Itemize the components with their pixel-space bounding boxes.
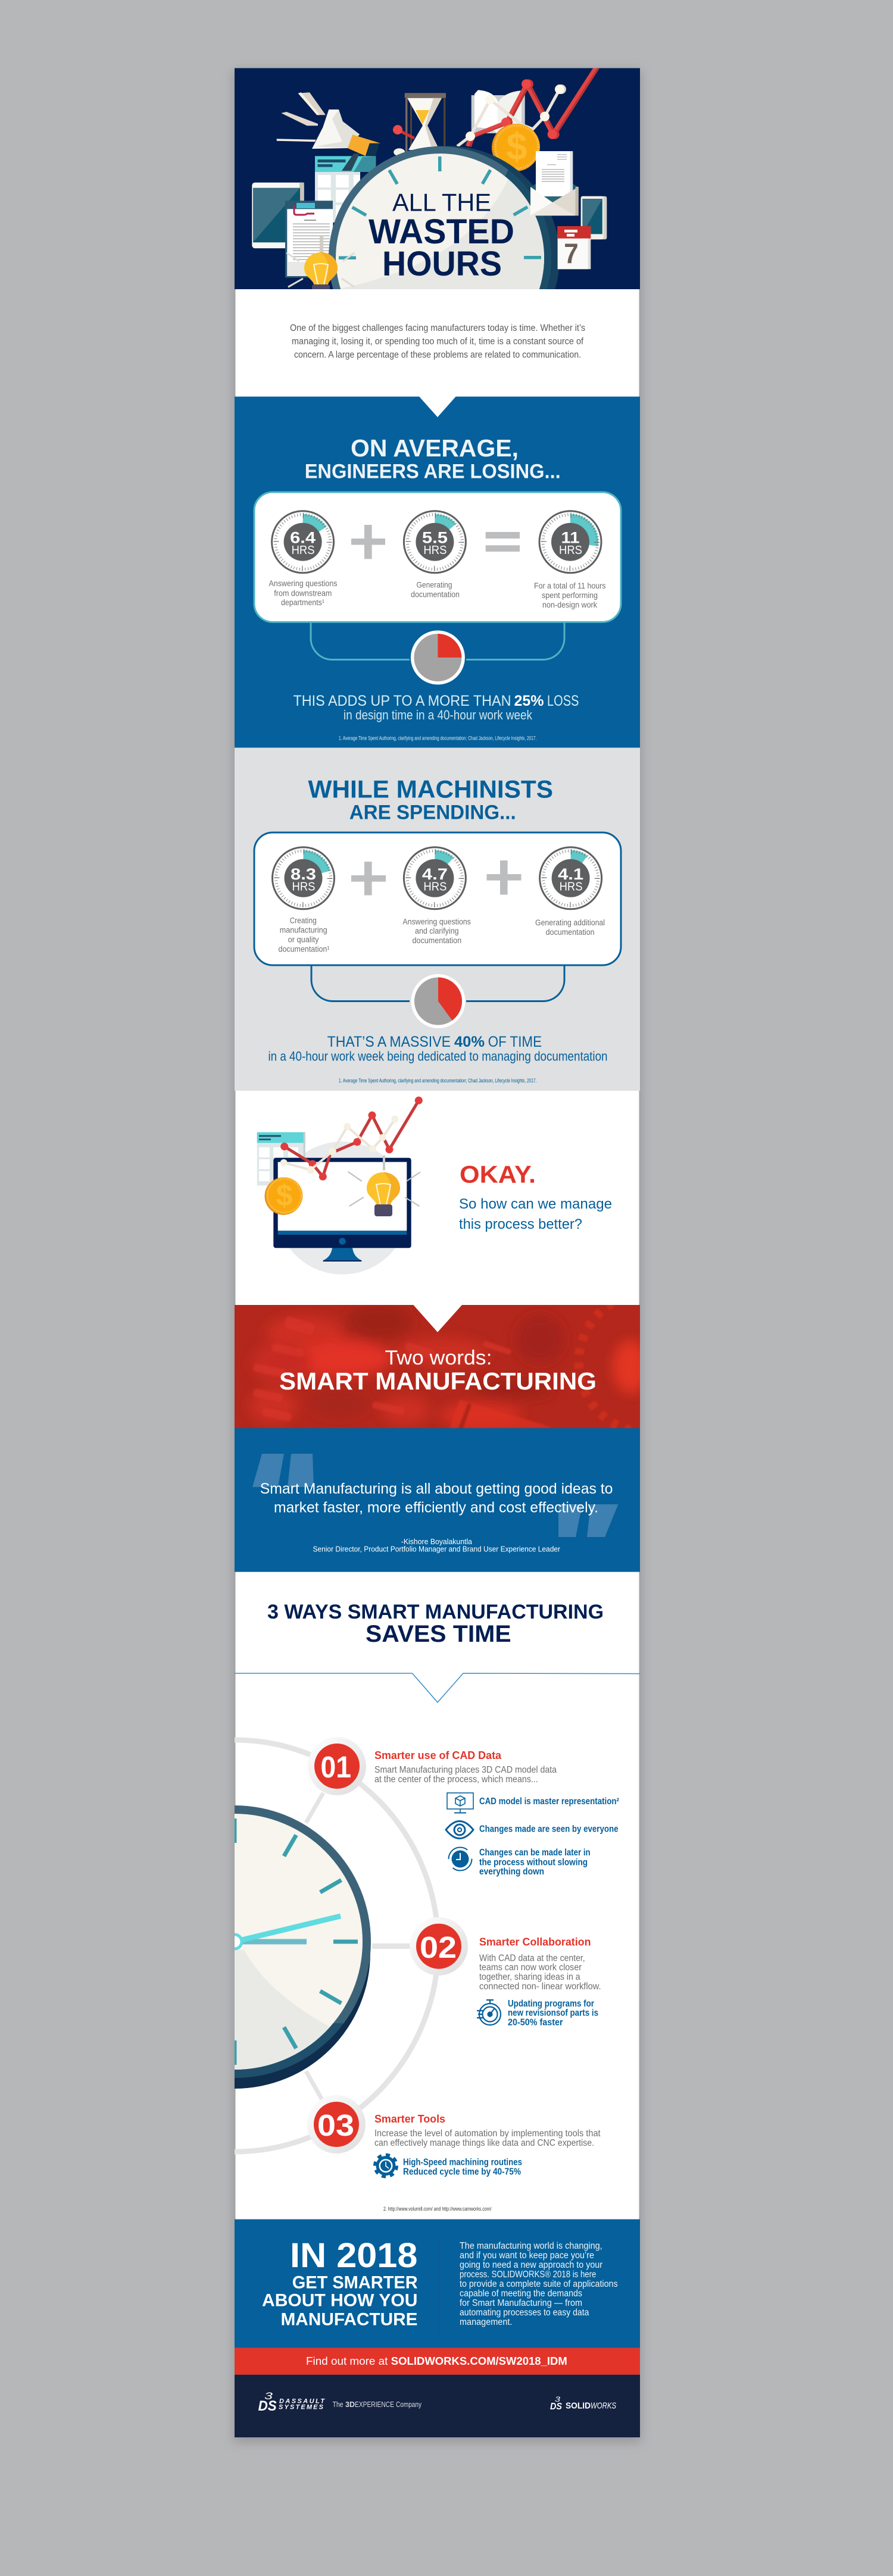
benefit: faster programs: new revisionsof parts is [508,2008,598,2018]
attribution: Senior Director, Product Portfolio Manager and Brand User Experience Leader [313,1545,560,1554]
panel: engineers section [235,396,640,748]
caption: answering questions: from downstream [274,589,332,597]
tagline: EXPERIENCE [355,2400,394,2409]
pointer notch [413,1304,462,1332]
paragraph: The manufacturing world is changing, [460,2241,602,2251]
paragraph: automating processes to easy data [460,2308,589,2318]
stopwatch: 6.4 hrs [272,511,334,573]
stopwatch: 5.5 hrs: HRS [423,544,447,557]
logo: solidworks: 3 [555,2395,560,2403]
icon: megaphone [277,92,380,156]
caption: additional documentation: Generating additional [535,918,605,927]
stopwatch: 5.5 hrs [404,511,466,573]
chart: red trend line [280,1097,423,1181]
title: ALL THE [392,188,491,217]
attribution [313,1538,560,1554]
heading: ON AVERAGE, [351,434,519,462]
paragraph [460,2241,618,2327]
icon: light bulb [286,252,355,289]
panel: two words banner [235,1305,640,1428]
tagline [333,2400,421,2409]
spokes [306,1793,411,2099]
benefit: changes later: everything down [479,1867,544,1877]
stopwatch: 4.1 hrs: HRS [560,880,583,893]
heading [305,434,561,483]
call to action bar: Find out more at [306,2355,388,2367]
spreadsheet [257,1132,305,1185]
text block: smarter collaboration: connected non- linear workflow. [479,1982,601,1992]
caption: total hours: For a total of 11 hours [534,581,606,590]
plus sign [351,525,385,559]
text block: smarter tools: Increase the level of automation by implementing tools that [374,2129,601,2139]
benefit: faster programs: 20-50% faster [508,2017,563,2028]
panel: machinists section [235,747,640,1091]
logo: solidworks: DS [550,2402,562,2412]
quote text: market faster, more efficiently and cost effectively. [274,1500,598,1516]
logo: dassault systemes: DASSAULT [279,2397,325,2405]
caption: answering questions: documentation [412,936,461,945]
icon: desk calendar [558,226,591,269]
caption: creating documentation: or quality [288,935,319,944]
question text [459,1196,612,1232]
caption: answering questions: departments¹ [281,598,324,607]
panel: three ways diagram [235,1737,619,2212]
icon: phone [581,196,607,239]
panel: quote [235,1428,640,1572]
footnote: 1. Average Time Spent Authoring, clarifying and amending documentation; Chad Jackson, Lifecycle Insights, 2017. [339,1078,536,1084]
text block: smarter tools [374,2113,601,2148]
icon: open book [472,90,525,133]
caption: creating documentation: Creating [290,916,317,925]
icon: light bulb [348,1156,420,1216]
benefit: high-speed machining: Reduced cycle time by 40-75% [403,2167,521,2177]
text block: smarter tools: can effectively manage things like data and CNC expertise. [374,2138,594,2148]
panel: hero header [235,68,640,289]
clock hands [227,1916,341,1949]
connector bracket [311,965,564,1001]
stopwatch: 11 hrs: HRS [559,544,582,557]
caption: creating documentation: documentation¹ [279,944,330,953]
text block: smarter use of CAD data: Smarter use of CAD Data [374,1749,502,1761]
heading: 3 ways: 3 WAYS SMART MANUFACTURING [267,1601,604,1623]
icon: coin: $ [276,1178,293,1212]
stopwatch: 8.3 hrs: 8.3 [291,865,316,883]
headline: GET SMARTER [292,2273,418,2292]
caption: creating documentation [279,916,330,953]
stopwatch: 8.3 hrs [273,847,335,909]
monitor [273,1158,411,1262]
logo: dassault systemes: SYSTEMES [279,2403,324,2411]
banner text: SMART MANUFACTURING [279,1367,597,1395]
paragraph: capable of meeting the demands [460,2289,582,2299]
headline: ABOUT HOW YOU [262,2291,417,2311]
pointer divider [235,1673,640,1702]
badge: 03 [307,2095,366,2154]
icon: calendar grid [315,154,376,223]
badge: 03: 03 [317,2108,354,2142]
stopwatch: 11 hrs: 11 [561,529,580,547]
statement [268,1034,607,1064]
paragraph: to provide a complete suite of applications [460,2279,618,2289]
closing quote mark [558,1504,618,1537]
benefit: high-speed machining: High-Speed machining routines [403,2158,522,2168]
caption: total hours: spent performing [542,591,598,600]
stopwatch: 8.3 hrs: HRS [292,880,316,893]
caption: additional documentation: documentation [546,928,595,937]
paragraph: process. SOLIDWORKS® 2018 is here [460,2270,596,2280]
statement: THAT’S A MASSIVE [327,1034,451,1050]
caption: generating documentation: Generating [417,581,452,589]
headline [262,2236,418,2329]
title [369,194,513,276]
big clock [235,1805,371,2089]
statement: in a 40-hour work week being dedicated to managing documentation [268,1049,607,1064]
heading [308,775,553,824]
caption: total hours: non-design work [542,600,597,609]
chart: cream trend line [457,84,566,146]
icon: gear clock [375,2155,396,2177]
benefit: master representation: CAD model is master representation² [479,1796,619,1807]
icon: hourglass [393,93,446,156]
statement: LOSS [547,693,579,709]
caption: answering questions: and clarifying [415,927,459,935]
footnote: 1. Average Time Spent Authoring, clarifying and amending documentation; Chad Jackson, Lifecycle Insights, 2017. [339,735,536,741]
white stats box [254,832,621,965]
stopwatch: 4.1 hrs: 4.1 [558,865,583,883]
icon: monitor with cube [447,1793,473,1813]
paragraph: and if you want to keep pace you’re [460,2251,594,2261]
stopwatch: 4.7 hrs [404,847,466,909]
stopwatch: 6.4 hrs: HRS [292,544,315,557]
headline: MANUFACTURE [281,2309,418,2329]
pie chart: 40 percent [411,974,466,1028]
badge: 01: 01 [320,1750,351,1784]
caption: answering questions: Answering questions [269,579,338,588]
benefit: faster programs [508,1999,598,2028]
icon: clock with arrows [449,1847,472,1871]
logo: solidworks [550,2395,616,2412]
illustration: monitor with chart [257,1097,423,1275]
stopwatch: 5.5 hrs: 5.5 [422,529,448,547]
caption: answering questions: Answering questions [402,918,471,926]
paragraph: going to need a new approach to your [460,2260,602,2270]
clock dial [329,146,559,289]
benefit: changes later: Changes can be made later in [479,1848,591,1858]
call to action bar [235,2348,640,2375]
equals sign [486,532,520,552]
text block: smarter tools: Smarter Tools [374,2113,445,2125]
heading: 3 ways: SAVES TIME [366,1621,511,1647]
question text: So how can we manage [459,1196,612,1212]
intro text: One of the biggest challenges facing manufacturers today is time. Whether it’s [290,323,585,333]
logo: dassault systemes: 3 [264,2390,273,2402]
tagline: Company [396,2400,421,2409]
call to action bar: SOLIDWORKS.COM/SW2018_IDM [391,2355,567,2367]
chart: red trend line [467,68,598,146]
logo: dassault systemes: DS [258,2398,277,2414]
panel: in 2018 [235,2220,640,2348]
text block: smarter collaboration: together, sharing ideas in a [479,1972,580,1982]
text block: smarter collaboration: Smarter Collaboration [479,1936,591,1948]
question text: this process better? [459,1216,582,1232]
footnote: 2. http://www.volumill.com/ and http://www.camworks.com/ [383,2206,492,2212]
title: WASTED [369,212,514,251]
tagline: The [333,2400,344,2409]
panel: footer logos [235,2375,640,2437]
intro text: concern. A large percentage of these problems are related to communication. [294,350,581,360]
caption: answering questions [269,579,338,607]
benefit: changes later: the process without slowing [479,1857,588,1867]
orbit arc [235,1738,439,2154]
icon: eye [446,1821,473,1839]
paragraph: for Smart Manufacturing — from [460,2298,582,2308]
okay heading: OKAY. [460,1161,536,1188]
icon: clipboard document [285,201,333,278]
badge: 02 [410,1917,468,1976]
intro text [290,323,585,360]
vertical divider [438,2236,439,2334]
stopwatch: 6.4 hrs: 6.4 [290,529,316,547]
benefit: high-speed machining [403,2158,522,2177]
logo: solidworks: SOLID [566,2401,591,2411]
connector bracket [311,622,564,659]
text block: smarter use of CAD data: at the center of the process, which means... [374,1774,538,1785]
heading: 3 ways [267,1601,604,1647]
stopwatch: 4.1 hrs [540,847,602,909]
infographic canvas [230,67,645,2446]
icon: tablet [252,183,304,248]
statement: THIS ADDS UP TO A MORE THAN [293,693,511,709]
stopwatch: 4.7 hrs: HRS [423,880,447,893]
stopwatch: 11 hrs [539,511,601,573]
benefit: changes seen: Changes made are seen by everyone [479,1824,619,1835]
panel drop shadow [233,70,641,2442]
badge: 01 [308,1737,366,1795]
chart: cream trend line [280,1116,398,1173]
statement: OF TIME [488,1034,542,1050]
benefit: faster programs: Updating programs for [508,1999,594,2009]
icon: document and envelope [530,151,579,215]
opening quote mark [252,1454,314,1487]
heading: ARE SPENDING... [349,801,516,824]
caption: generating documentation: documentation [411,590,460,599]
plus sign [351,862,386,895]
caption: total hours [534,581,606,609]
tagline: 3D [345,2400,355,2409]
title: HOURS [382,245,502,283]
caption: creating documentation: manufacturing [280,926,327,934]
quote text [260,1481,613,1516]
banner text: Two words: [385,1347,492,1369]
badge: 02: 02 [420,1930,457,1964]
caption: answering questions [402,918,471,945]
logo: dassault systemes [258,2390,325,2414]
heading: ENGINEERS ARE LOSING... [305,461,561,483]
statement: 40% [454,1034,485,1050]
heading: WHILE MACHINISTS [308,775,553,803]
benefit: changes later [479,1848,591,1877]
attribution: -Kishore Boyalakuntla [401,1538,472,1546]
white stats box [254,492,621,622]
text block: smarter collaboration: With CAD data at the center, [479,1953,585,1963]
logo: solidworks: WORKS [591,2401,616,2411]
statement: in design time in a 40-hour work week [344,708,533,722]
pointer notch [419,396,456,417]
text block: smarter use of CAD data [374,1749,557,1785]
banner text [279,1347,597,1395]
icon: coin [492,124,540,171]
headline: IN 2018 [290,2236,417,2275]
icon: desk calendar: 7 [564,237,579,269]
text block: smarter collaboration [479,1936,601,1992]
white panel base [236,289,639,2253]
paragraph: management. [460,2317,512,2327]
icon: coin [265,1177,303,1215]
icon: fast stopwatch [477,2000,501,2025]
intro text: managing it, losing it, or spending too much of it, time is a constant source of [292,337,584,346]
text block: smarter use of CAD data: Smart Manufacturing places 3D CAD model data [374,1765,557,1775]
pie chart: 25 percent [411,631,465,684]
statement [293,693,579,722]
text block: smarter collaboration: teams can now work closer [479,1962,582,1973]
icon: coin: $ [506,125,527,168]
statement: 25% [514,693,544,709]
caption: additional documentation [535,918,605,937]
stopwatch: 4.7 hrs: 4.7 [422,865,448,883]
caption: generating documentation [411,581,460,599]
quote text: Smart Manufacturing is all about getting good ideas to [260,1481,613,1497]
plus sign [487,860,522,895]
